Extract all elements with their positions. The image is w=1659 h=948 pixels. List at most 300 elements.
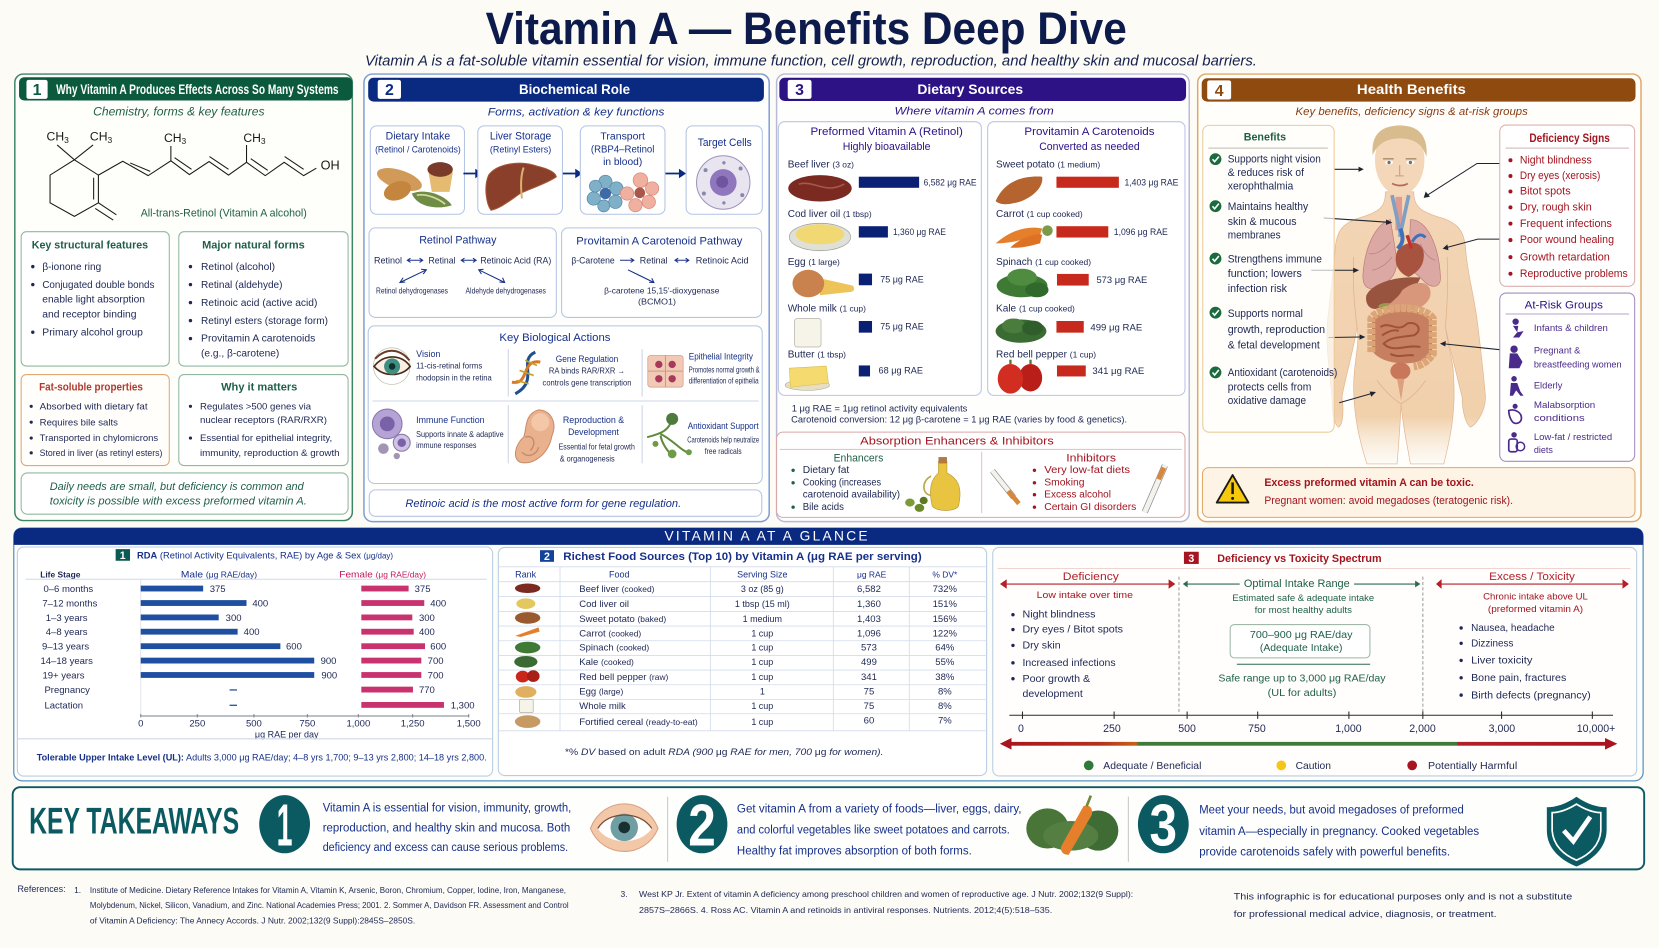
references: 3. xyxy=(621,889,628,899)
box: benefits: skin & mucous xyxy=(1228,216,1297,228)
action: vision: Vision xyxy=(416,349,440,359)
box: benefits: Supports night vision xyxy=(1228,153,1321,165)
box: major natural forms: Retinoic acid (active acid) xyxy=(201,298,317,309)
table panel: richest food sources: Richest Food Sources (Top 10) by Vitamin A (μg RAE per serving) xyxy=(563,551,922,563)
title: Vitamin A — Benefits Deep Dive xyxy=(486,3,1127,54)
anatomy figure xyxy=(1327,125,1486,464)
female values: 375 xyxy=(415,584,431,595)
callout: daily needs xyxy=(21,473,348,514)
male values: 900 xyxy=(321,671,337,682)
row: kale: 499 μg RAE xyxy=(1090,323,1142,334)
table rows: 1 cup xyxy=(751,628,773,638)
action: epithelial integrity: Promotes normal growth & xyxy=(689,366,760,375)
optimal range column: for most healthy adults xyxy=(1255,605,1353,615)
box: fat-soluble properties: Absorbed with dietary fat xyxy=(40,401,148,412)
box: provitamin A pathway: (BCMO1) xyxy=(638,297,676,307)
row: butter xyxy=(785,350,923,390)
optimal range column: Safe range up to 3,000 μg RAE/day xyxy=(1218,673,1386,684)
flow box: transport: (RBP4–Retinol xyxy=(591,144,654,155)
intake axis xyxy=(1009,712,1615,735)
row: sweet potato: Sweet potato (1 medium) xyxy=(996,159,1100,170)
molecule: all-trans-retinol: CH xyxy=(47,130,64,144)
panel 4 header xyxy=(1202,78,1636,102)
panel 1: why vitamin A xyxy=(15,74,352,521)
panel 4: health benefits xyxy=(1198,74,1641,522)
subtitle: Vitamin A is a fat-soluble vitamin essential for vision, immune function, cell growth, reproduction, and healthy skin and mucosal barriers. xyxy=(365,54,1257,70)
intake axis: 250 xyxy=(1103,723,1121,735)
box: benefits xyxy=(1203,125,1337,432)
table rows: 55% xyxy=(935,657,955,668)
excess column: Birth defects (pregnancy) xyxy=(1471,690,1591,701)
flow box: transport xyxy=(580,126,665,214)
takeaway 3: 3 xyxy=(1150,791,1177,858)
table rows: 3 oz (85 g) xyxy=(741,584,784,594)
box: absorption enhancers and inhibitors: Absorption Enhancers & Inhibitors xyxy=(860,435,1054,447)
adequate intake box: (Adequate Intake) xyxy=(1260,643,1342,654)
action: immune function: Immune Function xyxy=(416,415,485,425)
box: key biological actions: Key Biological Actions xyxy=(499,332,611,344)
molecule caption: All-trans-Retinol (Vitamin A alcohol) xyxy=(141,207,307,219)
box: fat-soluble properties: Stored in liver (as retinyl esters) xyxy=(40,448,162,459)
takeaway 3: provide carotenoids safely with powerful benefits. xyxy=(1199,845,1450,859)
row labels xyxy=(40,584,98,712)
female values: 600 xyxy=(430,642,446,653)
box: deficiency signs: Dry eyes (xerosis) xyxy=(1520,170,1600,182)
enhancers list: Enhancers xyxy=(834,452,883,464)
table rows: 1 cup xyxy=(751,701,773,711)
references: 1. xyxy=(74,885,81,895)
row: carrot: Carrot (1 cup cooked) xyxy=(996,209,1083,220)
table rows: Beef liver (cooked) xyxy=(579,584,655,595)
row: whole milk: Whole milk (1 cup) xyxy=(788,303,866,314)
row: butter: 68 μg RAE xyxy=(878,366,923,377)
table rows: Red bell pepper (raw) xyxy=(579,672,669,683)
box: key structural features xyxy=(21,232,169,366)
optimal range column: Optimal Intake Range xyxy=(1244,578,1350,590)
box: retinol pathway: Retinol xyxy=(374,255,402,266)
table grid xyxy=(498,567,987,731)
intake axis: 1,000 xyxy=(1335,723,1362,735)
box: provitamin A carotenoids: Provitamin A Carotenoids xyxy=(1024,126,1155,138)
female bars xyxy=(361,586,444,708)
box: key structural features: Conjugated double bonds xyxy=(42,280,154,291)
box: preformed vitamin A xyxy=(778,122,981,395)
action: gene regulation: Gene Regulation xyxy=(556,354,618,365)
icons: at-risk people xyxy=(1509,318,1525,452)
icon: carrot and greens xyxy=(1026,796,1118,855)
male values xyxy=(210,584,337,682)
action: immune function: immune responses xyxy=(416,440,476,450)
excess column: Nausea, headache xyxy=(1471,623,1555,634)
panel 1 subheading: Chemistry, forms & key features xyxy=(93,105,265,118)
icon: cigarette upright xyxy=(1145,466,1165,512)
box: fat-soluble properties: Requires bile salts xyxy=(40,417,118,428)
panel: deficiency vs toxicity spectrum xyxy=(993,547,1637,776)
action: epithelial integrity: Epithelial Integrity xyxy=(689,351,753,361)
box: benefits: & fetal development xyxy=(1228,340,1320,352)
action: antioxidant support xyxy=(647,413,760,458)
panel 3 header: Dietary Sources xyxy=(917,82,1023,98)
box: benefits: Supports normal xyxy=(1228,308,1303,320)
table rows: 151% xyxy=(933,599,958,610)
male values: 900 xyxy=(321,656,336,667)
box: at-risk groups: breastfeeding women xyxy=(1534,359,1622,370)
panel 2 subheading: Forms, activation & key functions xyxy=(488,106,665,118)
callout: daily needs: toxicity is possible with excess preformed vitamin A. xyxy=(50,496,307,508)
references: of Vitamin A Deficiency: The Annecy Accords. J Nutr. 2002;132(9 Suppl):2845S–2850S. xyxy=(90,915,415,925)
row: red bell pepper xyxy=(996,350,1144,394)
table header: μg RAE xyxy=(857,569,887,579)
disclaimer xyxy=(1234,891,1572,920)
intake axis: 500 xyxy=(1178,723,1196,735)
arrow xyxy=(463,170,481,177)
table rows: 499 xyxy=(861,657,877,668)
table rows: 122% xyxy=(933,628,958,639)
box: fat-soluble properties xyxy=(21,375,169,466)
chart panel: RDA: 1 xyxy=(120,550,126,562)
row: butter: Butter (1 tbsp) xyxy=(788,350,846,361)
chart panel: RDA xyxy=(17,547,493,776)
molecule: all-trans-retinol: 3 xyxy=(261,136,266,146)
intake axis: 750 xyxy=(1248,723,1266,735)
takeaway 2: Healthy fat improves absorption of both forms. xyxy=(737,843,972,857)
row: red bell pepper: 341 μg RAE xyxy=(1092,366,1144,377)
female values: 1,300 xyxy=(451,701,475,712)
enhancers list: Bile acids xyxy=(803,502,844,513)
panel 1 header xyxy=(19,77,352,101)
female values: 770 xyxy=(419,685,435,696)
panel 3 subheading: Where vitamin A comes from xyxy=(895,105,1054,117)
row: spinach: Spinach (1 cup cooked) xyxy=(996,257,1091,268)
chart panel: RDA: Female (μg RAE/day) xyxy=(339,570,426,581)
box: at-risk groups xyxy=(1500,293,1635,461)
action: vision: rhodopsin in the retina xyxy=(416,372,492,382)
inhibitors list: Excess alcohol xyxy=(1044,490,1111,501)
table header: Rank xyxy=(515,569,537,579)
action: gene regulation: controls gene transcription xyxy=(543,377,632,387)
box: benefits: protects cells from xyxy=(1228,381,1312,393)
box: deficiency signs: Poor wound healing xyxy=(1520,234,1614,246)
panel 2 header: 2 xyxy=(385,82,394,99)
table rows: 1 tbsp (15 ml) xyxy=(735,599,790,609)
chart panel: RDA: Male (μg RAE/day) xyxy=(181,570,257,581)
male values: 400 xyxy=(252,599,268,610)
row: cod liver oil xyxy=(788,209,946,251)
box: why it matters: Why it matters xyxy=(221,381,297,393)
panel 3: dietary sources xyxy=(777,74,1189,522)
glance heading bar xyxy=(14,528,1643,545)
box: major natural forms xyxy=(179,232,348,366)
icon: shield with check xyxy=(1547,797,1607,867)
table rows: 1 cup xyxy=(751,642,773,652)
action: reproduction and development: Reproduction & xyxy=(563,415,625,425)
table rows: 573 xyxy=(861,642,877,653)
enhancers list: carotenoid availability) xyxy=(803,490,900,501)
enhancers list: Dietary fat xyxy=(803,465,849,476)
excess column: Dizziness xyxy=(1471,638,1513,649)
table header: Serving Size xyxy=(737,569,788,579)
box: major natural forms: (e.g., β-carotene) xyxy=(201,349,279,360)
box: key structural features: enable light absorption xyxy=(42,295,145,306)
excess column: Excess / Toxicity xyxy=(1489,571,1575,583)
x axis: 750 xyxy=(299,718,315,729)
panel 3 header: 3 xyxy=(795,82,804,99)
RAE note xyxy=(791,404,1127,424)
molecule: all-trans-retinol: 3 xyxy=(107,135,112,145)
chart panel: RDA: Life Stage xyxy=(40,570,81,580)
table rows: 7% xyxy=(938,716,952,727)
table rows: 1,403 xyxy=(857,614,881,625)
deficiency column: development xyxy=(1022,689,1083,700)
table rows: 6,582 xyxy=(857,584,881,595)
inhibitors list: Certain GI disorders xyxy=(1044,502,1136,513)
table rows: 8% xyxy=(938,701,952,712)
box: retinol pathway: Aldehyde dehydrogenases xyxy=(466,286,546,296)
takeaway 2 xyxy=(677,791,1022,858)
spectrum legend: Potentially Harmful xyxy=(1428,761,1517,772)
table rows: 60 xyxy=(864,716,874,727)
callout: toxicity warning xyxy=(1202,468,1635,517)
spectrum legend: Adequate / Beneficial xyxy=(1103,761,1201,772)
callout: daily needs: Daily needs are small, but deficiency is common and xyxy=(50,481,305,493)
box: at-risk groups: Malabsorption xyxy=(1534,400,1595,411)
action: gene regulation xyxy=(512,352,632,394)
excess column: Bone pain, fractures xyxy=(1471,673,1566,684)
arrow xyxy=(563,170,581,177)
action: antioxidant support: Carotenoids help neutralize xyxy=(687,435,760,444)
inhibitors list xyxy=(1033,452,1136,513)
row: beef liver xyxy=(788,159,977,202)
flow box: liver storage xyxy=(478,126,562,214)
box: at-risk groups: Pregnant & xyxy=(1534,346,1581,357)
box: why it matters xyxy=(179,375,348,466)
box: major natural forms: Retinyl esters (storage form) xyxy=(201,316,328,327)
head xyxy=(1372,125,1427,195)
deficiency column: Poor growth & xyxy=(1022,674,1091,685)
table header xyxy=(515,569,958,579)
table rows: Cod liver oil xyxy=(579,599,629,610)
row: whole milk: 75 μg RAE xyxy=(880,321,924,332)
references: West KP Jr. Extent of vitamin A deficiency among preschool children and women of reproductive age. J Nutr. 2002;132(9 Suppl): xyxy=(639,889,1133,899)
deficiency column: Low intake over time xyxy=(1037,590,1133,601)
intake axis: 3,000 xyxy=(1489,723,1515,735)
references: 2857S–2866S. 4. Ross AC. Vitamin A and retinoids in antiviral responses. Nutrients. 2012;4(5):518–535. xyxy=(639,905,1052,915)
table rows: 1 cup xyxy=(751,657,773,667)
female values: 300 xyxy=(419,613,435,624)
male values: 600 xyxy=(286,642,302,653)
box: major natural forms: Major natural forms xyxy=(202,240,305,252)
action: vision xyxy=(373,348,492,384)
row labels: Lactation xyxy=(44,701,83,712)
row labels: 4–8 years xyxy=(46,627,88,638)
references xyxy=(17,884,1133,925)
box: deficiency signs: Reproductive problems xyxy=(1520,268,1628,280)
row: cod liver oil: Cod liver oil (1 tbsp) xyxy=(788,209,872,220)
box: key biological actions xyxy=(368,326,762,484)
callout: toxicity warning: Excess preformed vitamin A can be toxic. xyxy=(1264,477,1474,489)
icon: cell xyxy=(697,156,750,209)
references: Institute of Medicine. Dietary Reference Intakes for Vitamin A, Vitamin K, Arsenic, Boron, Chromium, Copper, Iodine, Iron, Manganese, xyxy=(90,885,566,895)
box: provitamin A pathway: Retinal xyxy=(640,255,668,266)
flow box: dietary intake: (Retinol / Carotenoids) xyxy=(375,144,461,154)
row: red bell pepper: Red bell pepper (1 cup) xyxy=(996,350,1096,361)
x axis: μg RAE per day xyxy=(255,729,319,739)
table rows: 1 xyxy=(760,686,765,696)
flow box: transport: in blood) xyxy=(603,157,642,168)
molecule: all-trans-retinol: CH xyxy=(243,131,261,145)
panel 2: biochemical role xyxy=(364,74,769,522)
excess column xyxy=(1437,571,1628,701)
table header: % DV* xyxy=(932,569,958,579)
panel: vitamin A at a glance xyxy=(14,528,1643,781)
table rows: Carrot (cooked) xyxy=(579,628,641,639)
panel: deficiency vs toxicity spectrum: 3 xyxy=(1188,553,1194,565)
intake axis: 10,000+ xyxy=(1577,723,1615,735)
panel 3 header xyxy=(779,78,1186,101)
box: at-risk groups: At-Risk Groups xyxy=(1525,300,1603,312)
table rows: Sweet potato (baked) xyxy=(579,614,666,625)
panel 2 header: Biochemical Role xyxy=(519,82,630,98)
callout: retinoic acid: Retinoic acid is the most active form for gene regulation. xyxy=(405,498,681,510)
box: retinol pathway: Retinal xyxy=(429,255,455,266)
box: major natural forms: Retinol (alcohol) xyxy=(201,262,275,273)
box: major natural forms: Provitamin A carotenoids xyxy=(201,334,315,345)
box: benefits: oxidative damage xyxy=(1228,395,1306,407)
box: provitamin A pathway: Provitamin A Carotenoid Pathway xyxy=(576,235,743,247)
box: retinol pathway: Retinol Pathway xyxy=(419,234,497,246)
row labels: 9–13 years xyxy=(42,642,89,653)
intake axis: 0 xyxy=(1018,723,1024,735)
box: why it matters: Regulates >500 genes via xyxy=(200,401,312,412)
box: deficiency signs xyxy=(1500,125,1635,286)
x axis: 500 xyxy=(246,718,262,729)
intake axis: 2,000 xyxy=(1409,723,1436,735)
excess column: Chronic intake above UL xyxy=(1483,591,1588,601)
box: fat-soluble properties: Transported in chylomicrons xyxy=(40,433,158,444)
x axis: 1,000 xyxy=(346,718,370,729)
table panel: richest food sources xyxy=(498,547,987,776)
box: key structural features: Primary alcohol group xyxy=(42,327,143,338)
table row icons xyxy=(514,584,540,728)
UL note: Tolerable Upper Intake Level (UL): Adults 3,000 μg RAE/day; 4–8 yrs 1,700; 9–13 yrs 2,800; 14–18 yrs 2,800. xyxy=(37,753,487,764)
female values: 700 xyxy=(428,671,444,682)
box: benefits: Strengthens immune xyxy=(1228,253,1322,265)
excess column: (preformed vitamin A) xyxy=(1488,604,1583,614)
box: at-risk groups: Low-fat / restricted xyxy=(1534,432,1612,443)
arrows: carotenoid conversion xyxy=(620,258,689,282)
row: egg: 75 μg RAE xyxy=(880,274,924,285)
action: reproduction and development: Development xyxy=(568,427,619,437)
table header: Food xyxy=(609,569,630,579)
row: egg: Egg (1 large) xyxy=(788,257,840,268)
glance heading bar: VITAMIN A AT A GLANCE xyxy=(664,529,869,544)
table rows: 64% xyxy=(935,642,955,653)
row: beef liver: Beef liver (3 oz) xyxy=(788,159,854,170)
box: benefits: Antioxidant (carotenoids) xyxy=(1228,367,1337,379)
inhibitors list: Inhibitors xyxy=(1066,452,1116,464)
row: whole milk xyxy=(788,303,924,347)
lungs xyxy=(1363,220,1397,289)
x axis xyxy=(138,714,481,739)
table rows: 75 xyxy=(864,686,874,697)
references: Molybdenum, Nickel, Silicon, Vanadium, and Zinc. National Academies Press; 2001. 2. Sommer A, Davidson FR. Assessment and Control xyxy=(90,900,569,910)
table rows: Fortified cereal (ready-to-eat) xyxy=(579,717,698,728)
row: beef liver: 6,582 μg RAE xyxy=(924,177,977,188)
panel 4 header: Health Benefits xyxy=(1357,82,1466,98)
table rows: Egg (large) xyxy=(579,686,623,697)
adequate intake box: 700–900 μg RAE/day xyxy=(1250,630,1352,641)
table footnote: *% DV based on adult RDA (900 μg RAE for men, 700 μg for women). xyxy=(565,747,883,758)
box: key structural features: Key structural features xyxy=(32,240,148,252)
icon: liver xyxy=(486,163,556,210)
row labels: 0–6 months xyxy=(43,584,93,595)
optimal range column xyxy=(1184,578,1419,699)
box: provitamin A pathway xyxy=(562,228,762,317)
box: retinol pathway xyxy=(369,228,556,317)
row: carrot xyxy=(996,209,1168,248)
table rows xyxy=(579,584,958,728)
arrow xyxy=(666,170,685,177)
female values: 700 xyxy=(428,656,444,667)
takeaway 2: Get vitamin A from a variety of foods—liver, eggs, dairy, xyxy=(737,802,1022,816)
icon: eye xyxy=(590,804,658,851)
box: provitamin A pathway: Retinoic Acid xyxy=(696,255,749,266)
box: deficiency signs: Bitot spots xyxy=(1520,185,1571,197)
deficiency column: Dry eyes / Bitot spots xyxy=(1022,624,1123,635)
row: sweet potato xyxy=(996,159,1178,204)
optimal range column: Estimated safe & adequate intake xyxy=(1232,593,1374,603)
box: at-risk groups: Infants & children xyxy=(1534,323,1608,334)
liver and stomach xyxy=(1366,277,1420,309)
box: provitamin A pathway: β-Carotene xyxy=(571,255,615,266)
female values xyxy=(415,584,475,712)
box: deficiency signs: Frequent infections xyxy=(1520,218,1612,230)
intestines xyxy=(1372,311,1432,363)
box: key structural features: β-ionone ring xyxy=(42,262,101,273)
callout: toxicity warning: Pregnant women: avoid megadoses (teratogenic risk). xyxy=(1264,495,1513,507)
x axis: 1,500 xyxy=(457,718,481,729)
panel: deficiency vs toxicity spectrum: Deficiency vs Toxicity Spectrum xyxy=(1217,553,1382,565)
table rows: 732% xyxy=(933,584,958,595)
arrows to anatomy xyxy=(1311,163,1500,403)
takeaway 1: Vitamin A is essential for vision, immunity, growth, xyxy=(323,801,571,815)
row: cod liver oil: 1,360 μg RAE xyxy=(893,227,946,238)
table panel: richest food sources: 2 xyxy=(544,551,550,563)
row: spinach: 573 μg RAE xyxy=(1096,275,1147,286)
table rows: 341 xyxy=(861,672,877,683)
key takeaways heading: KEY TAKEAWAYS xyxy=(29,800,239,842)
body silhouette xyxy=(1327,192,1486,464)
action: antioxidant support: free radicals xyxy=(705,447,742,456)
icon: warning triangle xyxy=(1217,475,1248,503)
female values: 400 xyxy=(419,627,435,638)
row: carrot: 1,096 μg RAE xyxy=(1114,227,1168,238)
molecule: all-trans-retinol: 3 xyxy=(182,136,187,146)
box: provitamin A pathway: β-carotene 15,15′-dioxygenase xyxy=(604,286,720,296)
box: benefits: xerophthalmia xyxy=(1228,180,1293,192)
table rows: 1,096 xyxy=(857,628,881,639)
row labels: 7–12 months xyxy=(42,599,98,610)
molecule: all-trans-retinol: OH xyxy=(321,158,340,172)
molecule: all-trans-retinol: 3 xyxy=(64,135,69,145)
deficiency column xyxy=(1001,571,1174,700)
table rows: 1 medium xyxy=(743,614,782,624)
takeaway 1 xyxy=(259,791,571,858)
box: why it matters: nuclear receptors (RAR/RXR) xyxy=(200,415,327,426)
panel 1 header: 1 xyxy=(33,82,42,99)
box: benefits: Benefits xyxy=(1244,132,1286,144)
enhancers list: Cooking (increases xyxy=(803,478,881,489)
